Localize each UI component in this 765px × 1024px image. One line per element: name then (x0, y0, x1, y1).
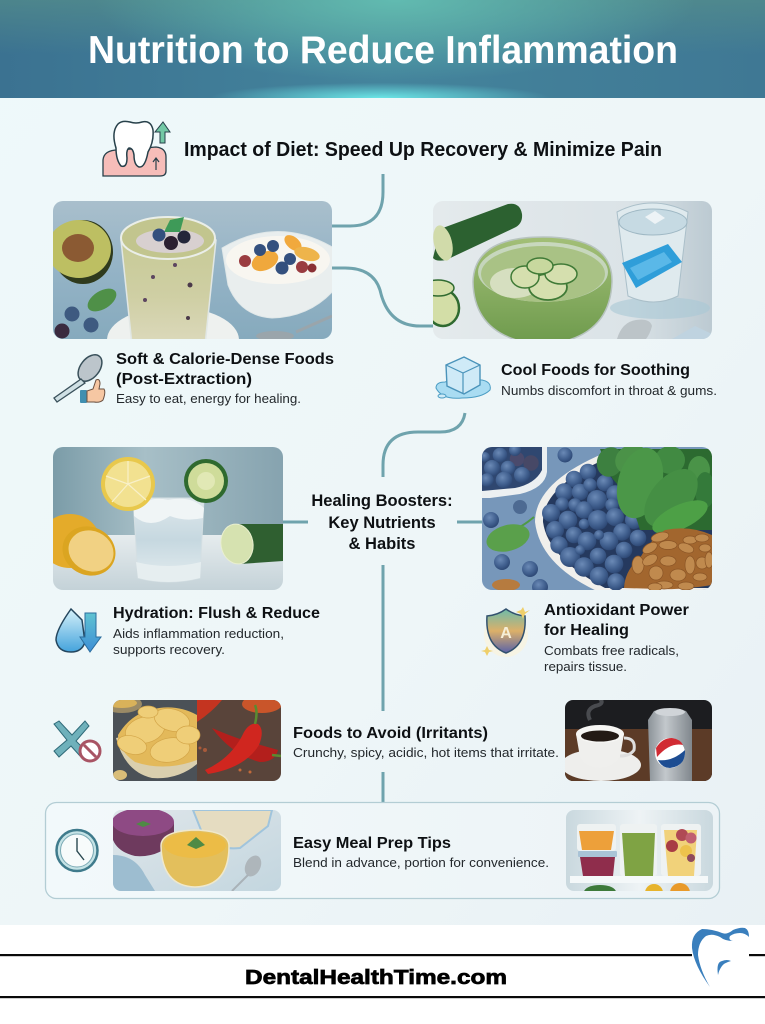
panel: soft and calorie-dense foods (47, 201, 334, 406)
panel: cool foods (422, 201, 717, 398)
text: foods to avoid: Crunchy, spicy, acidic, hot items that irritate. (293, 746, 559, 760)
icon: antioxidant shield (481, 607, 530, 657)
text: cool foods: Numbs discomfort in throat & gums. (501, 384, 717, 398)
heading: healing boosters (311, 492, 453, 553)
header banner (0, 0, 765, 98)
icon: spoon and thumbs up (54, 350, 107, 403)
title: Nutrition to Reduce Inflammation (88, 29, 678, 72)
photo: cucumber soup and iced water (422, 201, 712, 345)
panel: antioxidant power (480, 440, 715, 674)
icon: tooth and gum (103, 121, 170, 176)
logo: blue tooth (692, 928, 749, 987)
footer website: DentalHealthTime.com (245, 967, 507, 989)
text: soft foods (116, 351, 334, 406)
text: antioxidant power (544, 602, 689, 674)
icon: water drop with down arrow (56, 609, 101, 652)
panel: easy meal prep tips (46, 802, 720, 903)
panel: hydration (40, 447, 320, 657)
text: antioxidant power: Antioxidant Power (544, 602, 689, 619)
connector lines (283, 174, 482, 802)
photo: fridge with containers (566, 810, 713, 891)
heading: healing boosters: Key Nutrients (328, 514, 436, 532)
text: antioxidant power: Combats free radicals, (544, 644, 679, 658)
photo: lemon and cucumber water (40, 447, 283, 590)
text: soft foods: Soft & Calorie-Dense Foods (116, 351, 334, 368)
text: foods to avoid: Foods to Avoid (Irritants) (293, 725, 488, 742)
photo: chips and chili (113, 700, 281, 781)
photo: blueberries, spinach and walnuts (480, 440, 715, 595)
icon: clock (56, 830, 98, 871)
text: antioxidant power: repairs tissue. (544, 660, 627, 674)
icon: antioxidant shield: A (500, 625, 512, 642)
text: meal prep (293, 835, 549, 870)
text: cool foods: Cool Foods for Soothing (501, 362, 690, 379)
text: cool foods (501, 362, 717, 398)
text: antioxidant power: for Healing (544, 622, 629, 639)
text: hydration: Aids inflammation reduction, (113, 627, 284, 641)
heading: impact of diet: Impact of Diet: Speed Up Recovery & Minimize Pain (184, 139, 662, 161)
text: meal prep: Easy Meal Prep Tips (293, 835, 451, 852)
text: hydration (113, 605, 320, 657)
heading: healing boosters: & Habits (349, 535, 415, 553)
footer band (0, 925, 765, 1024)
heading: healing boosters: Healing Boosters: (311, 492, 453, 510)
photo: coffee and soda can (561, 699, 712, 781)
text: foods to avoid (293, 725, 559, 760)
photo: smoothie, avocado and yogurt (53, 201, 332, 339)
panel: foods to avoid (54, 695, 712, 781)
photo: prepared soups and containers (112, 808, 281, 891)
text: soft foods: (Post-Extraction) (116, 371, 252, 388)
text: hydration: Hydration: Flush & Reduce (113, 605, 320, 622)
text: soft foods: Easy to eat, energy for healing. (116, 392, 301, 406)
text: hydration: supports recovery. (113, 643, 225, 657)
icon: melting ice cube (436, 357, 490, 398)
icon: cross with prohibition sign (54, 721, 100, 761)
text: meal prep: Blend in advance, portion for convenience. (293, 856, 549, 870)
